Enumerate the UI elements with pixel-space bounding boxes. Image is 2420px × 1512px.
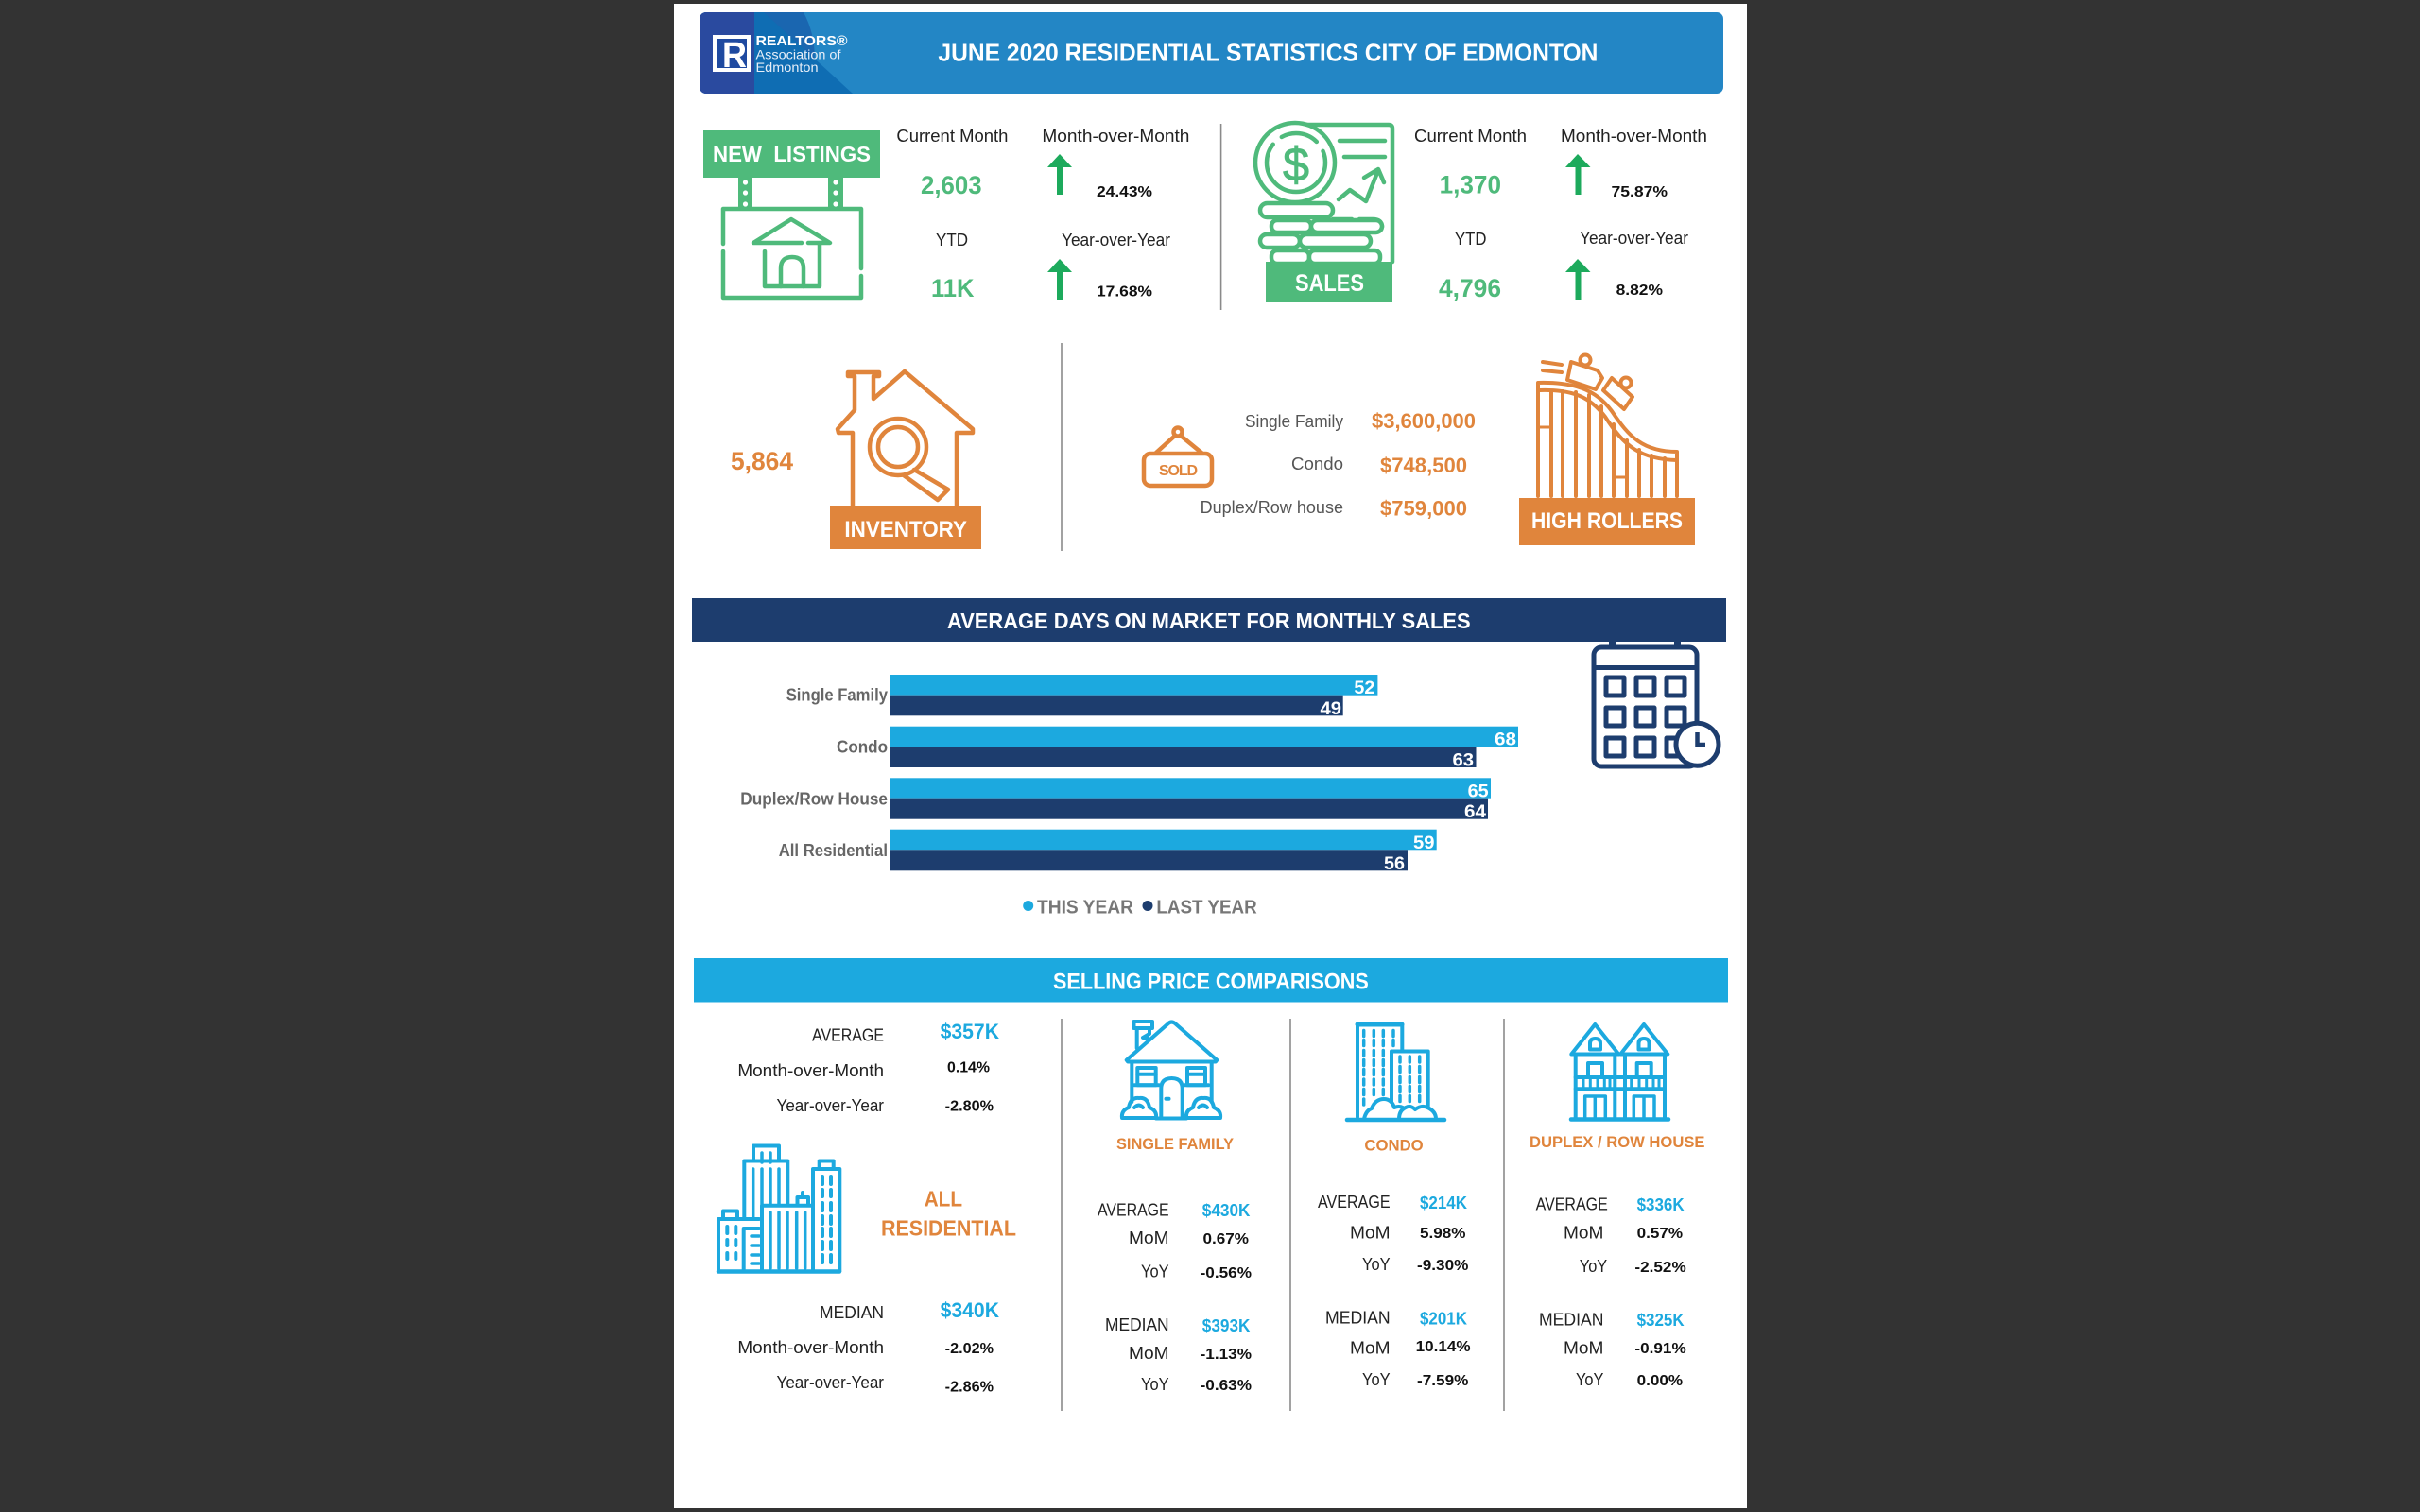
average stats: 0.57% xyxy=(1637,1226,1683,1242)
icon: hanging house sign xyxy=(723,178,861,298)
median stats: Month-over-Month xyxy=(737,1337,884,1357)
row: condo: Condo xyxy=(837,738,888,757)
median stats: 0.00% xyxy=(1637,1373,1683,1389)
stat: ytd xyxy=(931,230,975,302)
heading: average days on market: AVERAGE DAYS ON MARKET FOR MONTHLY SALES xyxy=(947,609,1471,633)
stat: month-over-month: 75.87% xyxy=(1611,184,1668,200)
average stats xyxy=(1536,1194,1686,1276)
stat: ytd xyxy=(1439,229,1501,302)
stat: year-over-year xyxy=(1565,228,1688,300)
icon: coins and document: $ xyxy=(1283,138,1309,191)
row: single family xyxy=(786,675,1377,719)
average stats: YoY xyxy=(1141,1262,1169,1281)
stat: current month xyxy=(1414,126,1527,198)
median stats: MoM xyxy=(1564,1338,1603,1358)
inventory label: INVENTORY xyxy=(844,517,967,542)
median stats: -2.86% xyxy=(945,1380,994,1396)
logo text: REALTORS® xyxy=(756,33,847,49)
row: duplex/row house: Duplex/Row House xyxy=(740,790,888,809)
median stats: $201K xyxy=(1420,1310,1467,1329)
stat: year-over-year xyxy=(1047,230,1170,301)
legend: THIS YEAR xyxy=(1037,898,1134,919)
heading: average days on market xyxy=(692,598,1726,642)
stat: current month: 1,370 xyxy=(1440,170,1501,198)
median stats: $393K xyxy=(1202,1316,1250,1335)
icon: house with magnifier xyxy=(838,371,973,506)
icon: realtors logo mark xyxy=(713,35,751,76)
median stats xyxy=(1105,1314,1252,1394)
panel: single family xyxy=(1098,1022,1252,1394)
inventory value: 5,864 xyxy=(731,447,793,475)
average stats: 0.67% xyxy=(1202,1231,1249,1247)
average stats: $336K xyxy=(1637,1195,1685,1214)
average stats: AVERAGE xyxy=(1536,1194,1608,1214)
median stats: -2.02% xyxy=(945,1341,994,1357)
average stats xyxy=(1318,1192,1468,1274)
stat: current month: Current Month xyxy=(1414,126,1527,146)
median stats xyxy=(737,1298,999,1396)
price: condo xyxy=(1291,454,1467,477)
row: condo xyxy=(837,727,1518,771)
stat: month-over-month: 24.43% xyxy=(1097,184,1152,200)
icon: city buildings xyxy=(718,1145,839,1272)
stat: current month xyxy=(896,126,1008,199)
inventory label xyxy=(830,506,981,549)
high rollers label xyxy=(1519,498,1695,545)
median stats: YoY xyxy=(1362,1369,1391,1389)
single family label: SINGLE FAMILY xyxy=(1116,1135,1235,1153)
icon: realtors logo mark: R xyxy=(722,36,747,76)
legend xyxy=(1023,898,1257,919)
average stats: Year-over-Year xyxy=(777,1095,884,1115)
stat: ytd: YTD xyxy=(1455,229,1486,249)
average stats: MoM xyxy=(1129,1228,1169,1247)
bar chart: average days on market xyxy=(740,675,1518,919)
logo text xyxy=(756,33,847,75)
median stats xyxy=(1325,1308,1471,1389)
logo text: Edmonton xyxy=(756,60,819,75)
stat: month-over-month xyxy=(1042,126,1189,200)
icon: sold sign: SOLD xyxy=(1159,463,1198,479)
median stats: -0.91% xyxy=(1634,1341,1686,1357)
duplex label: DUPLEX / ROW HOUSE xyxy=(1530,1133,1705,1151)
heading: selling price comparisons: SELLING PRICE COMPARISONS xyxy=(1053,970,1369,995)
stat: ytd: YTD xyxy=(936,230,968,249)
panel: duplex / row house xyxy=(1530,1024,1705,1389)
new listings label: NEW LISTINGS xyxy=(713,142,871,166)
icon: calendar with clock xyxy=(1594,641,1719,766)
average stats: YoY xyxy=(1580,1256,1607,1276)
price: single family: $3,600,000 xyxy=(1372,409,1476,433)
price: condo: Condo xyxy=(1291,454,1343,473)
stat: ytd: 11K xyxy=(931,274,975,302)
panel: inventory xyxy=(731,371,981,549)
header banner xyxy=(700,12,1723,94)
row: condo: 63 xyxy=(1452,751,1474,771)
price: single family: Single Family xyxy=(1245,411,1344,431)
median stats: $340K xyxy=(941,1298,999,1322)
stat: year-over-year: 8.82% xyxy=(1616,283,1663,299)
price: duplex/row house xyxy=(1201,497,1467,521)
stat: month-over-month: Month-over-Month xyxy=(1561,126,1707,146)
median stats: $325K xyxy=(1637,1311,1685,1330)
row: all residential: 56 xyxy=(1384,854,1405,874)
average stats xyxy=(737,1020,999,1115)
median stats: 10.14% xyxy=(1416,1339,1471,1355)
median stats: YoY xyxy=(1576,1369,1603,1389)
median stats: MEDIAN xyxy=(1325,1308,1391,1328)
stat: month-over-month: Month-over-Month xyxy=(1042,126,1189,146)
all residential label: RESIDENTIAL xyxy=(881,1216,1016,1241)
icon: condo towers xyxy=(1347,1024,1444,1120)
row: all residential: All Residential xyxy=(779,841,888,860)
average stats: -2.52% xyxy=(1634,1260,1686,1276)
panel: new listings xyxy=(703,126,1189,302)
logo text: Association of xyxy=(756,47,841,62)
stat: current month: Current Month xyxy=(896,126,1008,146)
high rollers label: HIGH ROLLERS xyxy=(1531,508,1683,534)
median stats: YoY xyxy=(1141,1374,1169,1394)
median stats: MoM xyxy=(1129,1343,1169,1363)
icon: coins and document xyxy=(1255,123,1392,264)
panel: sales xyxy=(1255,123,1707,302)
legend: LAST YEAR xyxy=(1156,898,1257,919)
average stats: MoM xyxy=(1350,1223,1391,1243)
average stats: -0.56% xyxy=(1201,1265,1252,1281)
panel: all residential xyxy=(718,1020,1016,1396)
average stats: -9.30% xyxy=(1417,1258,1468,1274)
icon: duplex houses xyxy=(1571,1024,1668,1119)
icon: sold sign xyxy=(1144,427,1212,486)
median stats: -1.13% xyxy=(1201,1347,1252,1363)
average stats: AVERAGE xyxy=(1318,1192,1391,1211)
median stats: MEDIAN xyxy=(1105,1314,1169,1334)
icon: single family house xyxy=(1122,1022,1220,1119)
stat: year-over-year: Year-over-Year xyxy=(1580,228,1688,248)
average stats: $214K xyxy=(1420,1194,1467,1212)
heading: selling price comparisons xyxy=(694,958,1728,1002)
icon: roller coaster xyxy=(1538,355,1677,496)
median stats: MEDIAN xyxy=(820,1302,884,1322)
average stats: AVERAGE xyxy=(1098,1200,1169,1220)
average stats: $430K xyxy=(1202,1201,1250,1220)
stat: current month: 2,603 xyxy=(921,171,982,199)
average stats: MoM xyxy=(1564,1223,1603,1243)
row: duplex/row house xyxy=(740,778,1491,822)
stat: month-over-month xyxy=(1561,126,1707,200)
price: duplex/row house: Duplex/Row house xyxy=(1201,497,1343,517)
average stats: 0.14% xyxy=(947,1060,990,1076)
all residential label: ALL xyxy=(925,1187,962,1211)
new listings label xyxy=(703,130,880,178)
average stats: $357K xyxy=(941,1020,999,1043)
panel: condo xyxy=(1318,1024,1471,1389)
price: single family xyxy=(1245,409,1476,433)
average stats: 5.98% xyxy=(1420,1226,1465,1242)
page: white sheet xyxy=(674,4,1747,1508)
row: duplex/row house: 64 xyxy=(1464,802,1486,822)
title: JUNE 2020 RESIDENTIAL STATISTICS CITY OF EDMONTON xyxy=(938,38,1598,66)
row: single family: 49 xyxy=(1320,699,1341,719)
condo label: CONDO xyxy=(1364,1136,1424,1155)
average stats: YoY xyxy=(1362,1254,1391,1274)
average stats: -2.80% xyxy=(945,1098,994,1115)
stat: year-over-year: 17.68% xyxy=(1097,284,1152,301)
sales label: SALES xyxy=(1295,270,1364,297)
average stats xyxy=(1098,1200,1252,1281)
median stats: MEDIAN xyxy=(1539,1310,1603,1330)
row: single family: Single Family xyxy=(786,686,888,705)
median stats: Year-over-Year xyxy=(777,1372,884,1392)
median stats: -0.63% xyxy=(1201,1378,1252,1394)
median stats: -7.59% xyxy=(1417,1373,1468,1389)
all residential label xyxy=(881,1187,1016,1241)
row: single family: 52 xyxy=(1354,679,1374,698)
row: condo: 68 xyxy=(1495,730,1516,750)
median stats: MoM xyxy=(1350,1338,1391,1358)
row: duplex/row house: 65 xyxy=(1468,782,1489,801)
stat: year-over-year: Year-over-Year xyxy=(1062,230,1170,249)
average stats: AVERAGE xyxy=(812,1025,884,1045)
stat: ytd: 4,796 xyxy=(1439,274,1501,302)
panel: high rollers xyxy=(1144,355,1695,545)
median stats xyxy=(1539,1310,1686,1389)
average stats: Month-over-Month xyxy=(737,1060,884,1080)
price: duplex/row house: $759,000 xyxy=(1380,497,1467,521)
row: all residential: 59 xyxy=(1413,833,1435,853)
price: condo: $748,500 xyxy=(1380,454,1467,477)
row: all residential xyxy=(779,830,1437,874)
sales label xyxy=(1266,262,1392,302)
